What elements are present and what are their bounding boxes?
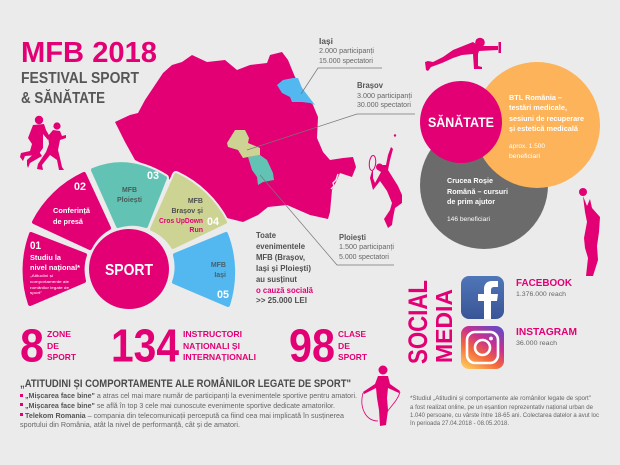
segment 05: MFB	[211, 262, 226, 269]
segment 03	[93, 164, 165, 226]
text: BTL: testări medicale,	[509, 103, 567, 112]
text block: social cause: >> 25.000 LEI	[256, 296, 307, 305]
heading: attitudes: „ATITUDINI ȘI COMPORTAMENTE ALE ROMÂNILOR LEGATE DE SPORT"	[20, 377, 351, 390]
body lines	[20, 393, 357, 429]
panel: health circles: SĂNĂTATE	[428, 114, 494, 130]
text: instagram: 36.000 reach	[516, 340, 557, 347]
stat: 8 zones: ZONE	[47, 329, 71, 339]
text: Red Cross: Română – cursuri	[447, 187, 508, 196]
segment 02: Conferință	[53, 206, 91, 215]
stat: 8 zones: 8	[20, 320, 44, 372]
text block: social cause: Toate	[256, 231, 277, 240]
stat: 134 instructors: INTERNAȚIONALI	[183, 352, 256, 362]
bullets	[20, 394, 23, 416]
callout: Iași: 2.000 participanți	[319, 48, 374, 55]
panel: health circles	[420, 62, 600, 249]
segment 04: MFB	[188, 198, 203, 205]
callout: Ploiești: 5.000 spectatori	[339, 254, 389, 261]
segment 01: 01	[30, 240, 41, 252]
segment 03: MFB	[122, 187, 137, 194]
region: Ploiești	[248, 155, 274, 185]
body lines: „Mișcarea face bine" se află în top 3 cele mai cunoscute evenimente sportive dedicate amatorilor.	[25, 403, 335, 410]
stat: 98 classes: DE	[338, 341, 350, 351]
text block: social cause: Iași și Ploiești)	[256, 264, 311, 273]
text block: social cause	[256, 231, 314, 305]
callout: Iași: Iași	[319, 37, 333, 46]
text: Red Cross: de prim ajutor	[447, 197, 495, 206]
segment 03: 03	[147, 170, 159, 182]
callout: Brașov: Brașov	[357, 81, 384, 90]
callout: Brașov: 3.000 participanți	[357, 93, 412, 100]
segment 01: comportamente ale	[30, 280, 69, 284]
callout: Ploiești: 1.500 participanți	[339, 244, 394, 251]
icon: instagram	[461, 326, 504, 369]
icon: tennis player	[369, 134, 402, 228]
text block: social cause: evenimentele	[256, 242, 306, 251]
stat: 134 instructors: 134	[111, 320, 179, 372]
heading: social media	[403, 280, 457, 364]
text block: social cause: MFB (Brașov,	[256, 253, 305, 262]
segment 02: de presă	[53, 217, 84, 226]
stat: 134 instructors: INSTRUCTORI	[183, 329, 242, 339]
circle: BTL	[474, 62, 600, 188]
stat: 8 zones	[20, 320, 77, 372]
text block: study findings	[20, 377, 357, 429]
text: BTL: și estetică medicală	[509, 124, 579, 133]
text: facebook: FACEBOOK	[516, 277, 572, 289]
text: Red Cross: Crucea Roșie	[447, 176, 493, 185]
callout: Brașov	[247, 81, 415, 150]
chart: sport segments	[25, 164, 233, 309]
icon: ball player	[579, 188, 600, 276]
footnote: 1.040 persoane, cu vârste între 18-65 ani. Colectarea datelor a avut loc	[410, 412, 600, 419]
sport hub	[89, 229, 169, 309]
body lines: „Mișcarea face bine" a atras cel mai mare număr de participanți la evenimentele sportive pentru amatori.	[25, 393, 357, 400]
stat: 98 classes: CLASE	[338, 329, 366, 339]
text: BTL	[509, 93, 584, 160]
text block: social cause: au susținut	[256, 275, 297, 284]
heading: social media: MEDIA	[431, 289, 457, 363]
stat: 8 zones: DE	[47, 341, 59, 351]
text: BTL: sesiuni de recuperare	[509, 114, 584, 123]
text: instagram: INSTAGRAM	[516, 326, 577, 338]
footnote: în perioada 27.04.2018 - 08.05.2018.	[409, 420, 509, 427]
segment 05	[174, 234, 233, 305]
stat: 8 zones: SPORT	[47, 352, 77, 362]
text block: social cause: o cauză socială	[256, 286, 314, 295]
map of Romania	[115, 52, 356, 222]
segment 04: Cros UpDown	[159, 218, 203, 225]
callout: Ploiești: Ploiești	[339, 233, 366, 242]
text: BTL: aprox. 1.500	[509, 143, 545, 150]
icon: runners	[20, 116, 66, 170]
text: instagram	[516, 326, 577, 347]
segment 03: Ploiești	[117, 197, 142, 204]
footnote	[409, 395, 600, 427]
segment 05: Iași	[214, 272, 226, 279]
map outline	[115, 52, 356, 222]
stat: 134 instructors	[111, 320, 256, 372]
segment 01: sport"	[30, 291, 43, 295]
segment 05: 05	[217, 289, 229, 301]
callout: Iași	[301, 37, 382, 94]
circle: Red Cross	[420, 121, 548, 249]
stat: 98 classes	[289, 320, 368, 372]
icon: jump rope figure	[362, 366, 400, 426]
segment 02: 02	[74, 181, 86, 193]
segment 04: Brașov și	[171, 208, 203, 215]
body lines: Telekom Romania – compania din telecomunicații percepută ca fiind cea mai implicată în susținerea	[25, 413, 344, 420]
text: BTL: BTL România –	[509, 93, 562, 102]
text: Red Cross: 146 beneficiari	[447, 216, 490, 223]
segment 01	[25, 234, 85, 304]
callout: Iași: 15.000 spectatori	[319, 58, 373, 65]
icon: plank figure	[425, 38, 501, 71]
subtitle line 1: FESTIVAL SPORT	[21, 70, 139, 87]
text: Red Cross	[447, 176, 508, 223]
text: facebook	[516, 277, 572, 298]
segment 04: 04	[207, 216, 220, 228]
title block	[21, 37, 157, 107]
body lines: sportului din România, atât la nivel de performanță, cât și de amatori.	[20, 422, 240, 429]
region: Iași	[277, 78, 315, 105]
icon: facebook	[461, 276, 504, 319]
segment 04: Run	[189, 227, 203, 234]
subtitle line 2: & SĂNĂTATE	[21, 88, 105, 107]
text: facebook: 1.376.000 reach	[516, 291, 566, 298]
text: BTL: beneficiari	[509, 153, 540, 160]
stat: 98 classes: SPORT	[338, 352, 368, 362]
stat: 98 classes: 98	[289, 320, 335, 372]
segment 01: nivel național*	[30, 263, 80, 272]
segment 01: Studiu la	[30, 253, 62, 262]
callout: Ploiești	[260, 175, 394, 265]
footnote: a fost realizat online, pe un eșantion reprezentativ național urban de	[410, 404, 593, 411]
segment 01: „Atitudini și	[30, 274, 53, 278]
segment 04	[152, 175, 225, 247]
region: Brașov	[227, 130, 260, 158]
main title: MFB 2018	[21, 37, 157, 69]
sport hub: SPORT	[105, 262, 153, 279]
Danube delta notch	[331, 174, 338, 189]
segment 02	[34, 174, 109, 248]
heading: social media: SOCIAL	[403, 280, 433, 364]
footnote: *Studiul „Atitudini și comportamente ale românilor legate de sport"	[410, 395, 592, 402]
segment 01: românilor legate de	[30, 286, 69, 290]
circle: health hub	[420, 81, 502, 163]
stat: 134 instructors: NAȚIONALI ȘI	[183, 341, 240, 351]
callout: Brașov: 30.000 spectatori	[357, 102, 411, 109]
